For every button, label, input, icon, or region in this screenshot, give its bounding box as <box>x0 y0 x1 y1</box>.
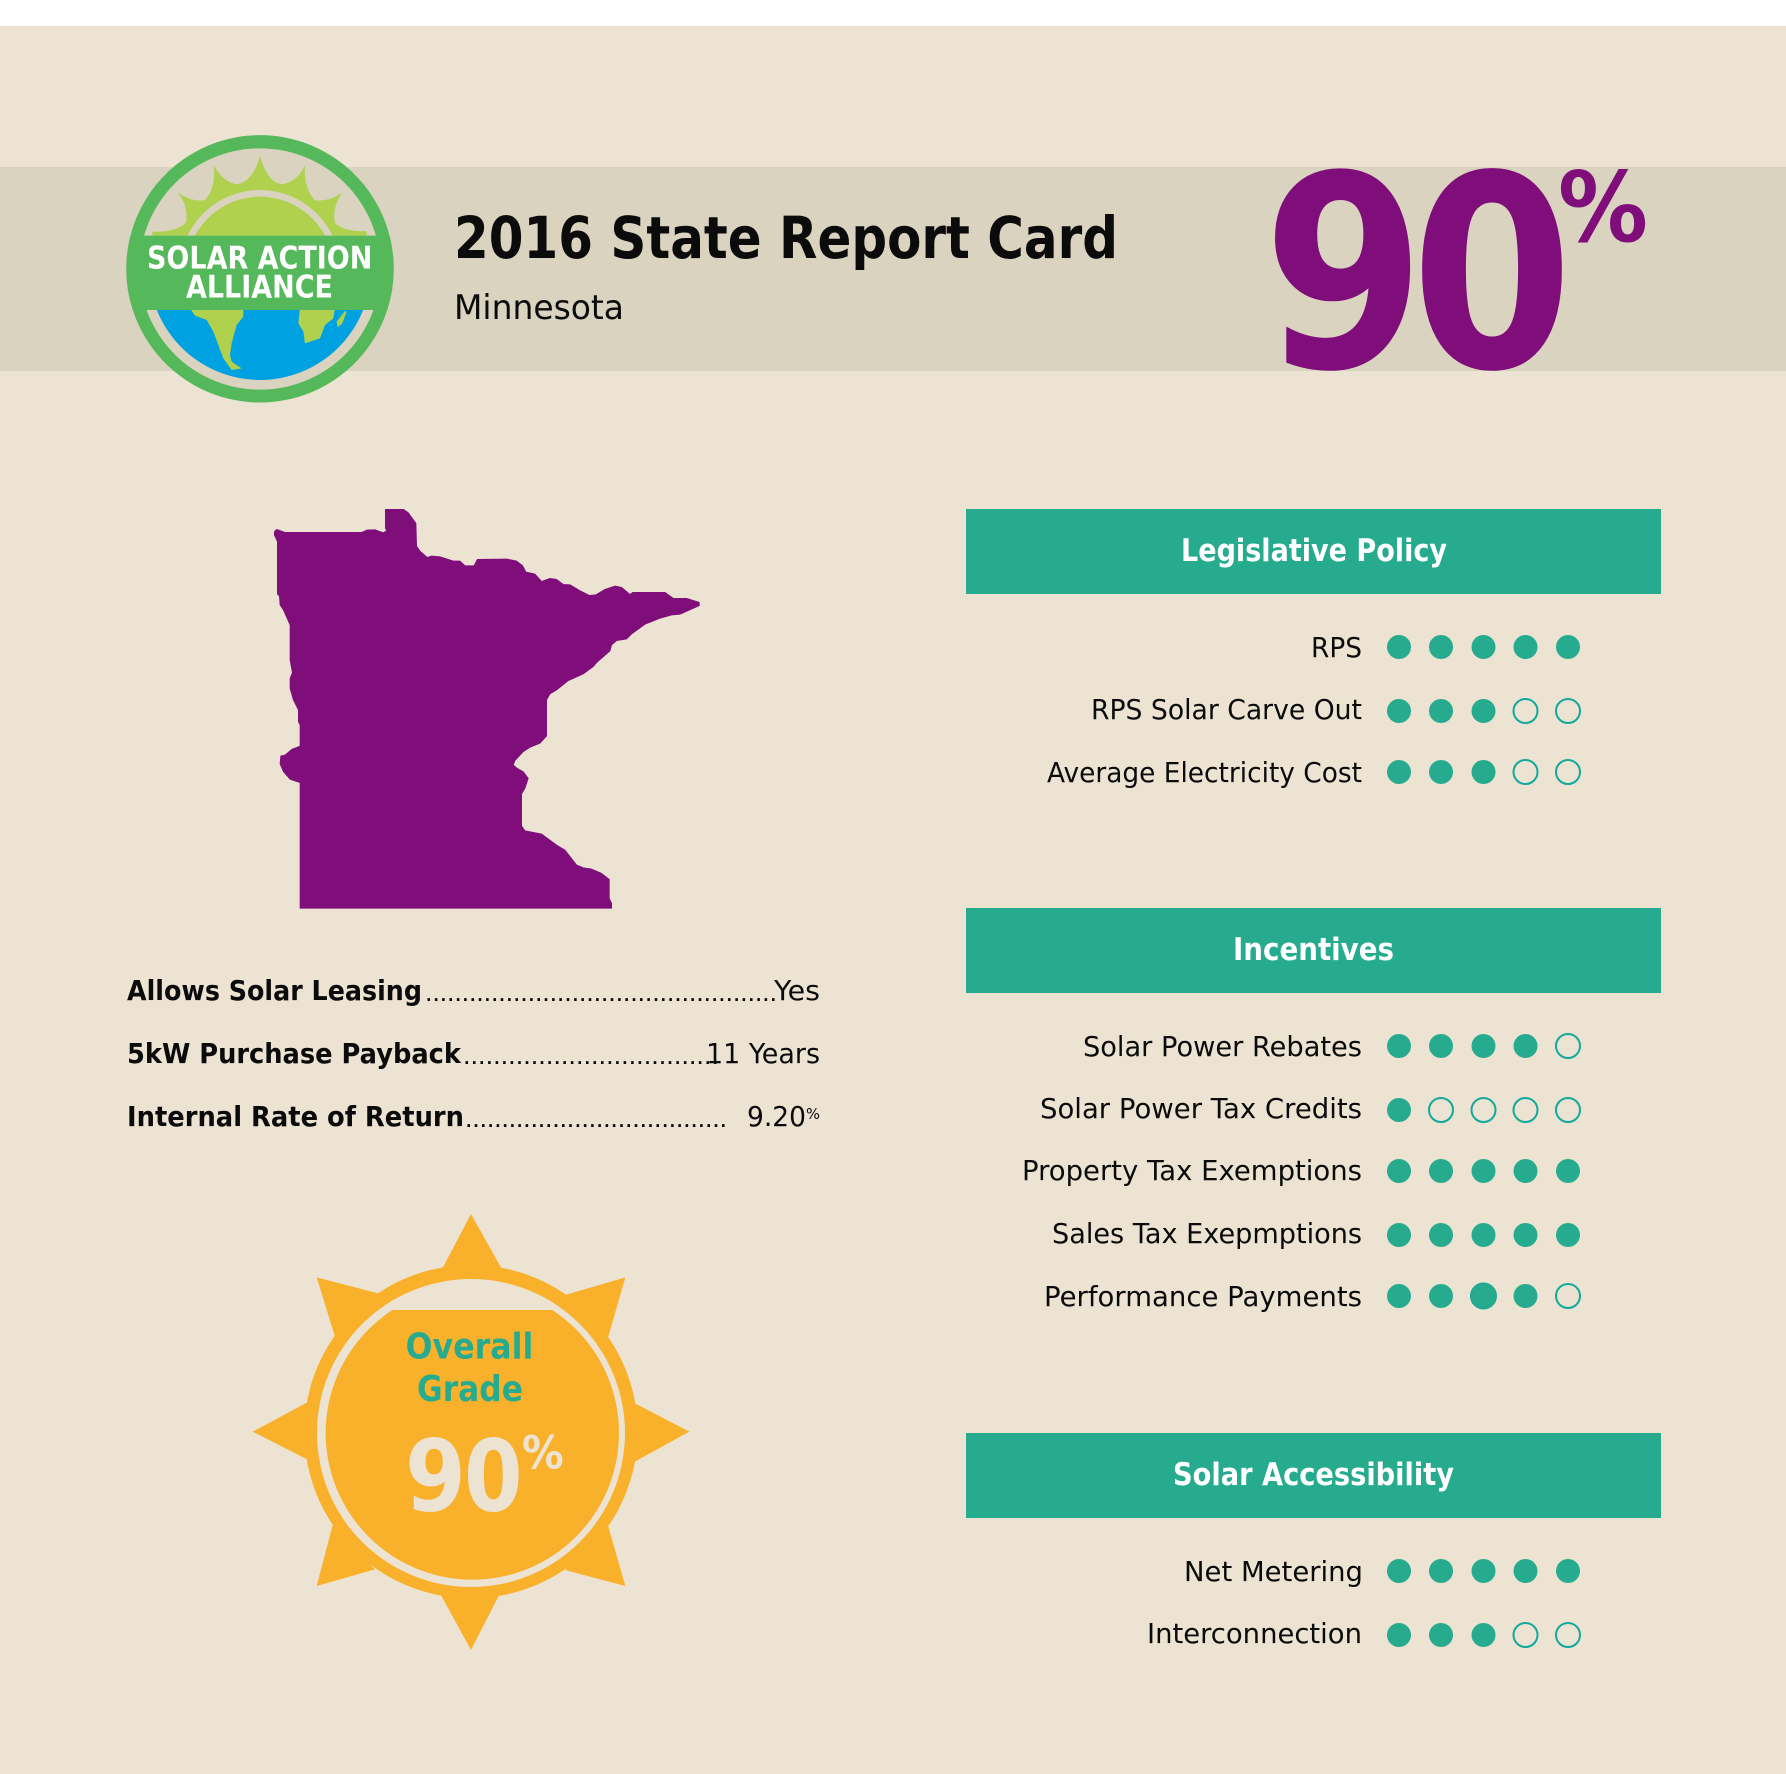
row: property tax exemptions: Property Tax Exemptions <box>1022 1154 1362 1187</box>
big grade score <box>1263 119 1648 431</box>
row: RPS solar carve out <box>1091 693 1580 726</box>
row: solar power tax credits <box>1040 1092 1580 1125</box>
heading bar: Legislative Policy <box>1181 533 1447 569</box>
stat: solar leasing: Allows Solar Leasing <box>127 974 422 1007</box>
heading bar: Incentives <box>1233 932 1394 968</box>
logo: Solar Action Alliance <box>125 135 395 402</box>
stat: internal rate of return: Internal Rate of Return <box>127 1100 464 1133</box>
row: sales tax exepmptions <box>1052 1217 1580 1250</box>
panel: incentives <box>966 908 1661 1313</box>
stat: internal rate of return: 9.20 <box>747 1100 806 1133</box>
panel: legislative policy <box>966 509 1661 789</box>
header band <box>0 167 1786 371</box>
stats list <box>127 974 820 1133</box>
panel: solar accessibility <box>966 1433 1661 1650</box>
stat: purchase payback: 5kW Purchase Payback <box>127 1037 462 1070</box>
stat: purchase payback <box>127 1037 820 1070</box>
badge heading <box>406 1326 533 1410</box>
big grade score: % <box>1558 151 1648 264</box>
heading bar <box>966 1433 1661 1518</box>
row: net metering: Net Metering <box>1184 1555 1363 1588</box>
row: performance payments <box>1044 1280 1580 1313</box>
row: RPS <box>1311 631 1580 664</box>
heading bar <box>966 509 1661 594</box>
stat: solar leasing <box>127 974 820 1007</box>
stat: purchase payback: 11 Years <box>706 1037 820 1070</box>
icon: sun rays <box>253 1214 689 1650</box>
heading bar <box>966 908 1661 993</box>
badge heading: Grade <box>417 1369 523 1410</box>
stat: internal rate of return <box>127 1100 820 1133</box>
row: interconnection: Interconnection <box>1147 1617 1362 1650</box>
badge score: 9 <box>405 1419 466 1534</box>
row: average electricity cost: Average Electricity Cost <box>1047 756 1362 789</box>
stat: solar leasing: Yes <box>773 974 820 1007</box>
big grade score: 9 <box>1263 119 1425 431</box>
badge score <box>405 1419 564 1534</box>
stat: internal rate of return: % <box>806 1105 820 1123</box>
row: RPS solar carve out: RPS Solar Carve Out <box>1091 693 1362 726</box>
logo: Solar Action Alliance: SOLAR ACTION <box>147 241 372 277</box>
heading bar: Solar Accessibility <box>1173 1457 1454 1493</box>
subtitle: state name: Minnesota <box>454 288 624 328</box>
row: solar power tax credits: Solar Power Tax Credits <box>1040 1092 1362 1125</box>
stat: internal rate of return: .................................... <box>465 1103 727 1133</box>
overall grade sun badge <box>253 1214 689 1650</box>
badge heading: Overall <box>406 1326 533 1367</box>
row: net metering <box>1184 1555 1580 1588</box>
row: average electricity cost <box>1047 756 1580 789</box>
map: Minnesota silhouette <box>274 509 699 908</box>
row: performance payments: Performance Payments <box>1044 1280 1362 1313</box>
row: sales tax exepmptions: Sales Tax Exepmptions <box>1052 1217 1362 1250</box>
title: 2016 State Report Card <box>454 204 1118 272</box>
stat: solar leasing: ................................................ <box>425 977 777 1007</box>
row: RPS: RPS <box>1311 631 1362 664</box>
row: interconnection <box>1147 1617 1580 1650</box>
big grade score: 0 <box>1411 119 1573 431</box>
logo: Solar Action Alliance: ALLIANCE <box>186 270 333 306</box>
row: property tax exemptions <box>1022 1154 1580 1187</box>
badge score: % <box>522 1427 564 1480</box>
row: solar power rebates: Solar Power Rebates <box>1083 1030 1362 1063</box>
badge score: 0 <box>464 1419 523 1534</box>
stat: purchase payback: .................................. <box>463 1040 719 1070</box>
row: solar power rebates <box>1083 1030 1580 1063</box>
